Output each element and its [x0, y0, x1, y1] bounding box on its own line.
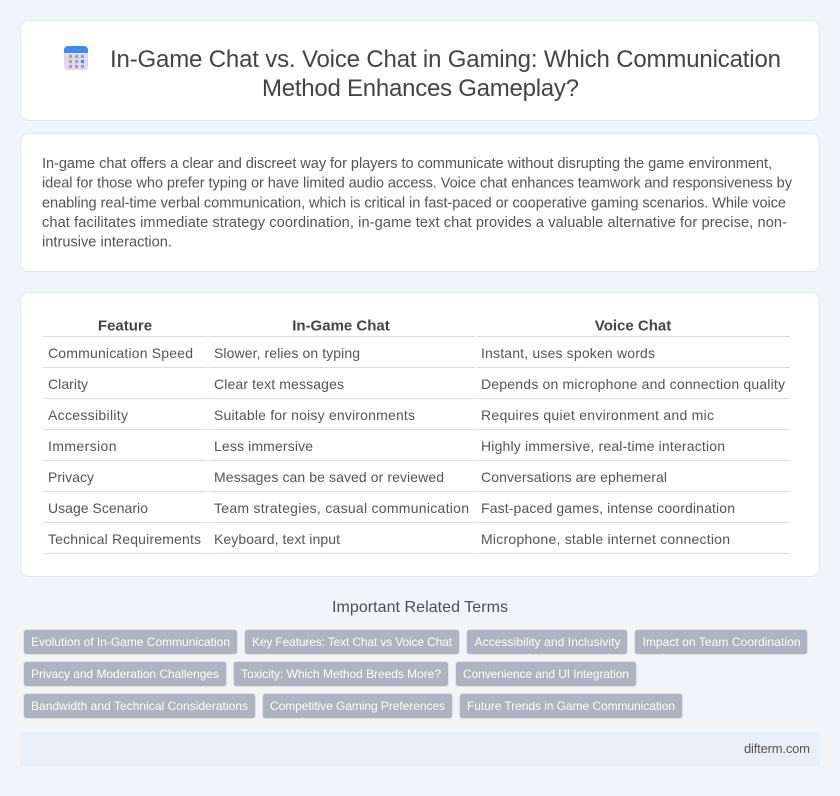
chip — [24, 694, 256, 718]
row: accessibility: Suitable for noisy environments — [214, 407, 415, 423]
chip: Bandwidth and Technical Considerations — [31, 699, 248, 713]
title — [110, 46, 781, 102]
table header — [98, 318, 671, 334]
chip — [456, 662, 636, 686]
chip: Future Trends in Game Communication — [467, 699, 675, 713]
row: clarity: Clear text messages — [214, 376, 344, 392]
row: technical requirements: Microphone, stable internet connection — [481, 531, 730, 547]
chip — [244, 630, 460, 654]
chip — [460, 694, 682, 718]
footer — [20, 732, 820, 766]
row: communication speed: Communication Speed — [48, 345, 193, 361]
row: communication speed: Instant, uses spoken words — [481, 345, 655, 361]
row: privacy: Messages can be saved or reviewed — [214, 469, 444, 485]
row: accessibility: Accessibility — [48, 407, 128, 423]
table header: Voice Chat — [595, 318, 671, 334]
text block: introduction: In-game chat offers a clear and discreet way for players to communicate without disrupting the game environment, — [42, 156, 772, 172]
table header: In-Game Chat — [292, 318, 390, 334]
title: In-Game Chat vs. Voice Chat in Gaming: Which Communication — [110, 46, 781, 73]
chip: Privacy and Moderation Challenges — [31, 667, 219, 681]
row: privacy: Privacy — [48, 469, 94, 485]
row: usage scenario — [48, 500, 735, 516]
chip — [234, 662, 448, 686]
row: accessibility — [48, 407, 714, 423]
text block: introduction: ideal for those who prefer typing or have limited audio access. Voice chat enhances teamwork and responsiveness by — [42, 176, 793, 192]
text block: introduction — [42, 156, 793, 251]
row: usage scenario: Fast-paced games, intense coordination — [481, 500, 735, 516]
table rules — [43, 336, 790, 554]
chip: Competitive Gaming Preferences — [270, 699, 445, 713]
chip: Convenience and UI Integration — [463, 667, 629, 681]
related term chips — [24, 630, 808, 718]
title: Method Enhances Gameplay? — [262, 75, 579, 102]
row: clarity: Depends on microphone and connection quality — [481, 376, 785, 392]
panel: header — [20, 20, 820, 120]
heading: related terms: Important Related Terms — [332, 599, 508, 616]
row: usage scenario: Usage Scenario — [48, 500, 148, 516]
row: immersion — [48, 438, 725, 454]
chip: Evolution of In-Game Communication — [31, 635, 230, 649]
row: immersion: Highly immersive, real-time interaction — [481, 438, 725, 454]
row: immersion: Less immersive — [214, 438, 313, 454]
panel: comparison table — [20, 292, 820, 576]
chip — [24, 630, 238, 654]
footer: difterm.com — [744, 741, 810, 756]
row: privacy: Conversations are ephemeral — [481, 469, 667, 485]
row: technical requirements: Technical Requirements — [48, 531, 201, 547]
chip: Impact on Team Coordination — [642, 635, 800, 649]
icon: calendar grid — [64, 46, 88, 70]
row: technical requirements — [48, 531, 730, 547]
row: clarity: Clarity — [48, 376, 88, 392]
chip: Key Features: Text Chat vs Voice Chat — [252, 635, 453, 649]
chip — [466, 630, 628, 654]
row: technical requirements: Keyboard, text input — [214, 531, 340, 547]
row: communication speed: Slower, relies on typing — [214, 345, 360, 361]
chip — [634, 630, 808, 654]
text block: introduction: chat facilitates immediate strategy coordination, in-game text chat provides a valuable alternative for precise, non- — [42, 215, 787, 231]
row: communication speed — [48, 345, 655, 361]
table header: Feature — [98, 318, 152, 334]
row: clarity — [48, 376, 785, 392]
chip: Toxicity: Which Method Breeds More? — [241, 667, 441, 681]
row: immersion: Immersion — [48, 438, 116, 454]
chip: Accessibility and Inclusivity — [474, 635, 620, 649]
panel: intro text — [20, 134, 820, 272]
chip — [24, 662, 226, 686]
text block: introduction: enabling real-time verbal communication, which is critical in fast-paced or cooperative gaming scenarios. While voice — [42, 195, 786, 211]
row: privacy — [48, 469, 667, 485]
text block: introduction: intrusive interaction. — [42, 235, 172, 251]
row: accessibility: Requires quiet environment and mic — [481, 407, 714, 423]
row: usage scenario: Team strategies, casual communication — [214, 500, 469, 516]
chip — [262, 694, 452, 718]
